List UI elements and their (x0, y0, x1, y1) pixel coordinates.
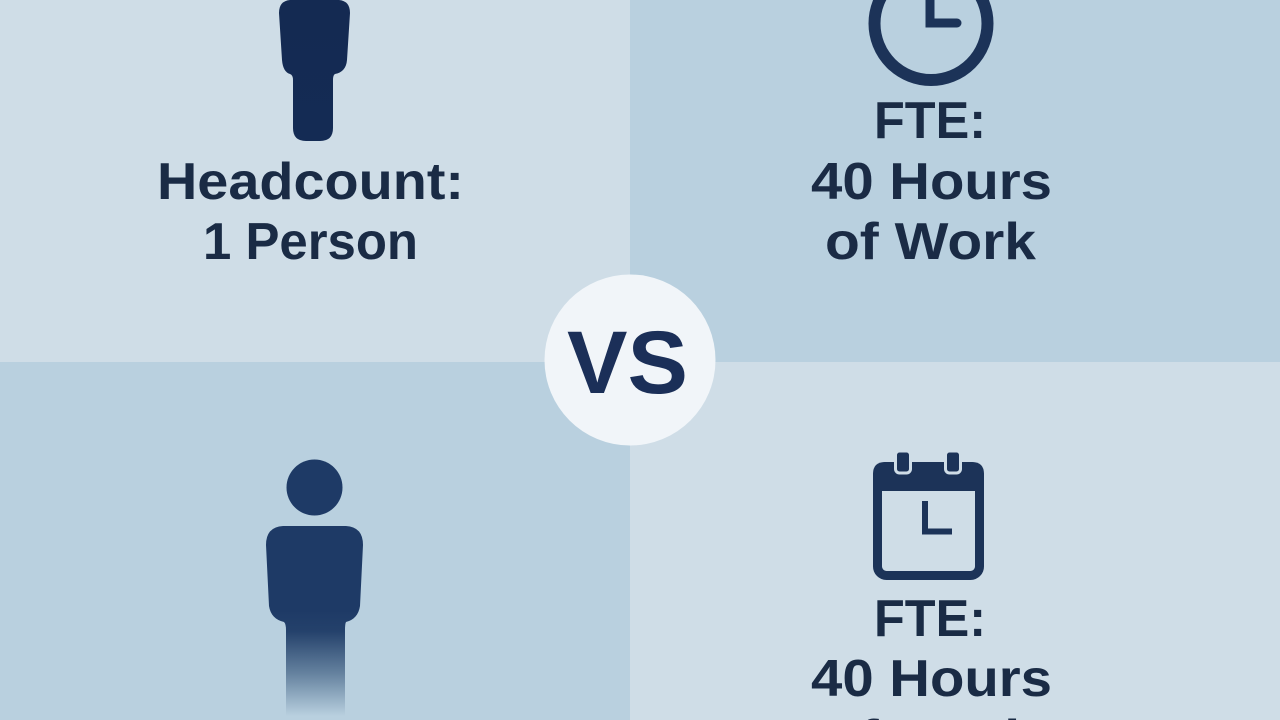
panel background: bottom right (630, 362, 1280, 720)
icon: person with fading legs (266, 460, 363, 720)
heading: FTE 40 hours of work, cropped: 40 Hours (811, 650, 1052, 708)
heading: FTE 40 hours of work (811, 92, 1052, 271)
badge circle (544, 274, 716, 446)
heading: FTE 40 hours of work: of Work (825, 213, 1036, 271)
heading: headcount 1 person (157, 153, 464, 271)
heading: headcount 1 person: Headcount: (157, 153, 464, 211)
panel background: top right (630, 0, 1280, 362)
panel background: bottom left (0, 362, 630, 720)
badge label: VS (567, 312, 688, 412)
panel: FTE bottom right (630, 362, 1280, 720)
icon: person cropped at the top (279, 0, 350, 141)
panel: fading person bottom left (0, 362, 630, 720)
panel: FTE top right (630, 0, 1280, 362)
heading: FTE 40 hours of work, cropped: FTE: (874, 590, 986, 648)
heading: FTE 40 hours of work, cropped (811, 590, 1052, 720)
VS badge (544, 274, 716, 446)
panel: headcount top left (0, 0, 630, 362)
heading: FTE 40 hours of work: 40 Hours (811, 153, 1052, 211)
panel background: top left (0, 0, 630, 362)
heading: FTE 40 hours of work: FTE: (874, 92, 986, 150)
person head (286, 460, 342, 516)
icon: calendar with clock hands (873, 451, 984, 576)
heading: headcount 1 person: 1 Person (203, 213, 418, 271)
icon: clock (874, 0, 988, 80)
person torso and fading legs (266, 526, 363, 720)
